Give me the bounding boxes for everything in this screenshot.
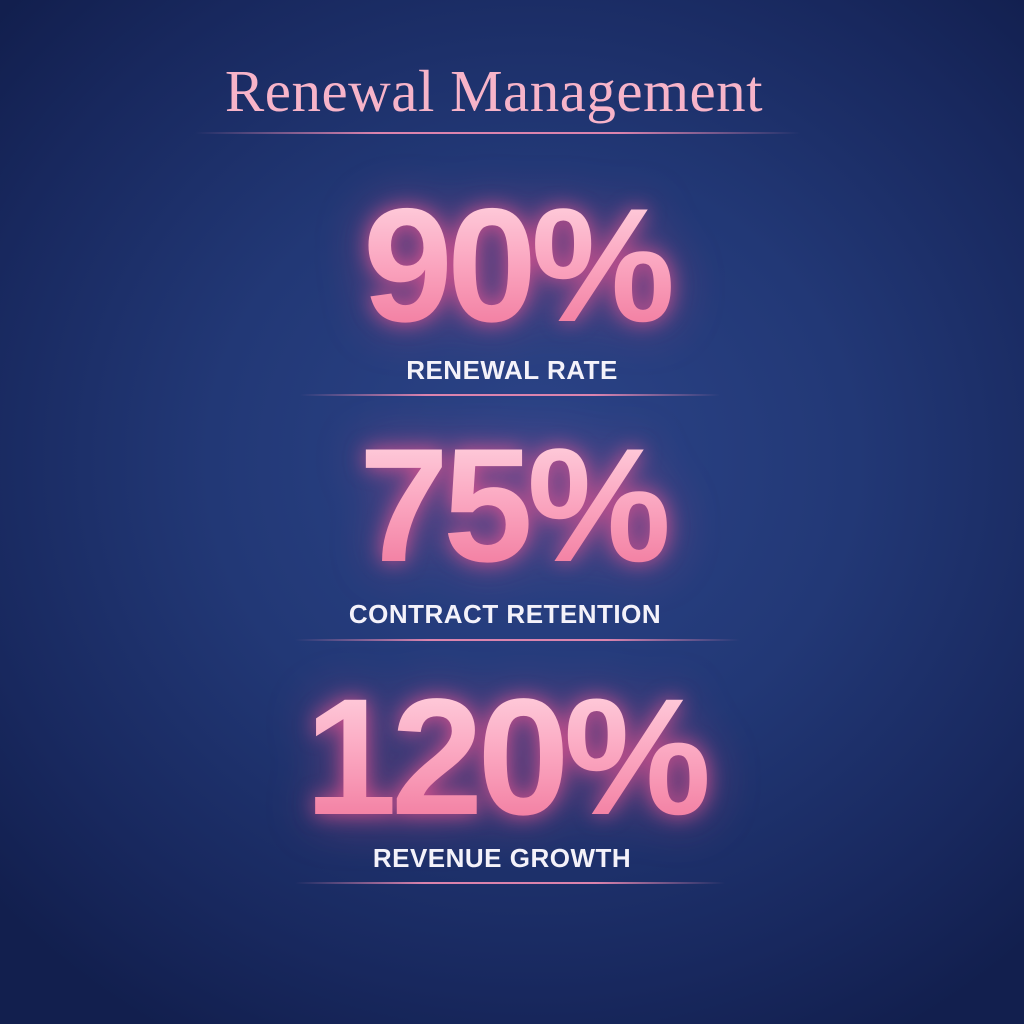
label: renewal rate: RENEWAL RATE <box>406 355 618 385</box>
label: contract retention: CONTRACT RETENTION <box>349 599 661 629</box>
title: Renewal Management <box>225 58 763 124</box>
stat: 90% <box>4 185 1024 347</box>
stat: 75%: 75% <box>359 415 665 596</box>
stat: 120%: 120% <box>305 665 705 850</box>
stat: 90%: 90% <box>363 175 669 356</box>
label: revenue growth: REVENUE GROWTH <box>373 843 631 873</box>
stat: 75% <box>0 425 1024 587</box>
stat: 120% <box>0 675 1017 841</box>
